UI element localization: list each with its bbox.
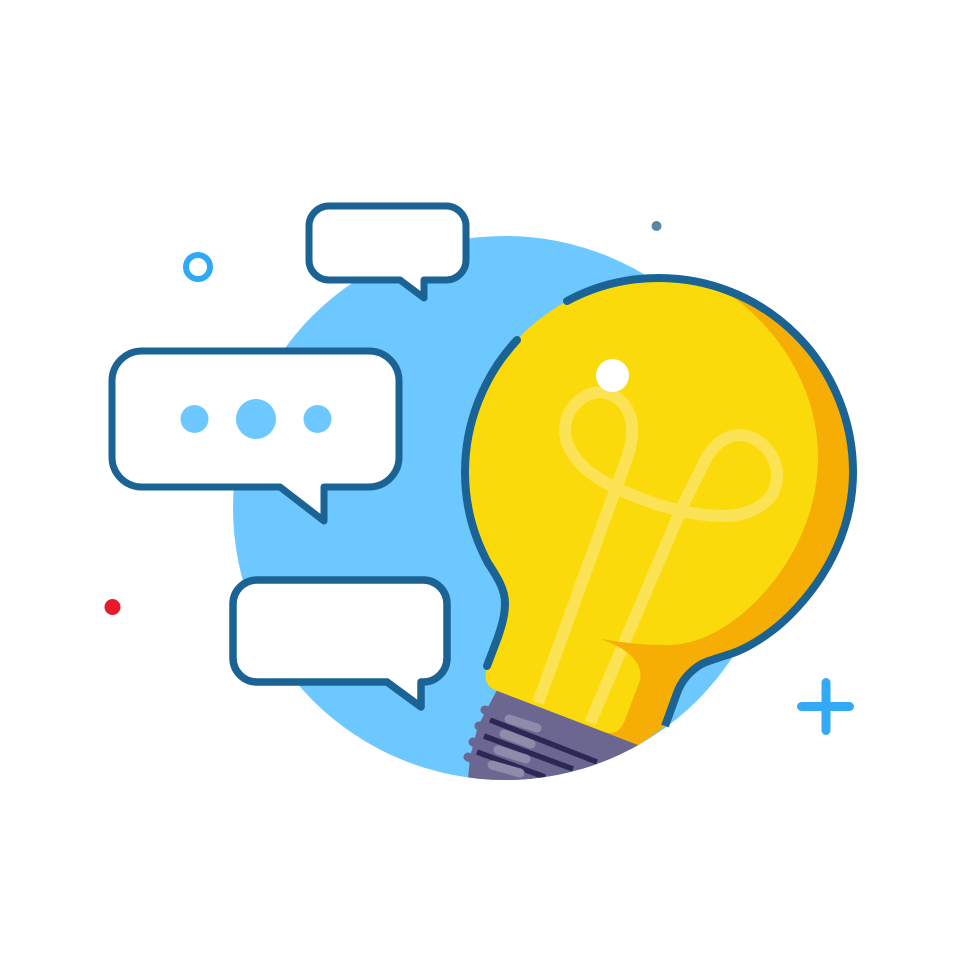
- bulb yellow glass: [465, 278, 818, 733]
- background blob: [233, 236, 777, 780]
- icon: plus: [802, 682, 850, 730]
- decoration: ring: [186, 255, 210, 279]
- bulb screw base: [464, 690, 640, 780]
- light bulb: [465, 278, 853, 800]
- speech bubble: top: [309, 206, 466, 298]
- speech bubble: middle with dots: [112, 351, 399, 521]
- bulb orange shade: [465, 278, 853, 745]
- speech bubble: bottom: [233, 580, 447, 707]
- decoration: red dot: [104, 599, 120, 615]
- bulb filament: [538, 392, 777, 723]
- bulb outline left: [465, 340, 517, 666]
- bulb outline top: [567, 278, 853, 615]
- decoration: small slate dot: [652, 221, 662, 231]
- bulb outline neck: [665, 615, 790, 726]
- illustration: light bulb idea with speech bubbles: [104, 202, 857, 780]
- white highlight: [596, 359, 629, 392]
